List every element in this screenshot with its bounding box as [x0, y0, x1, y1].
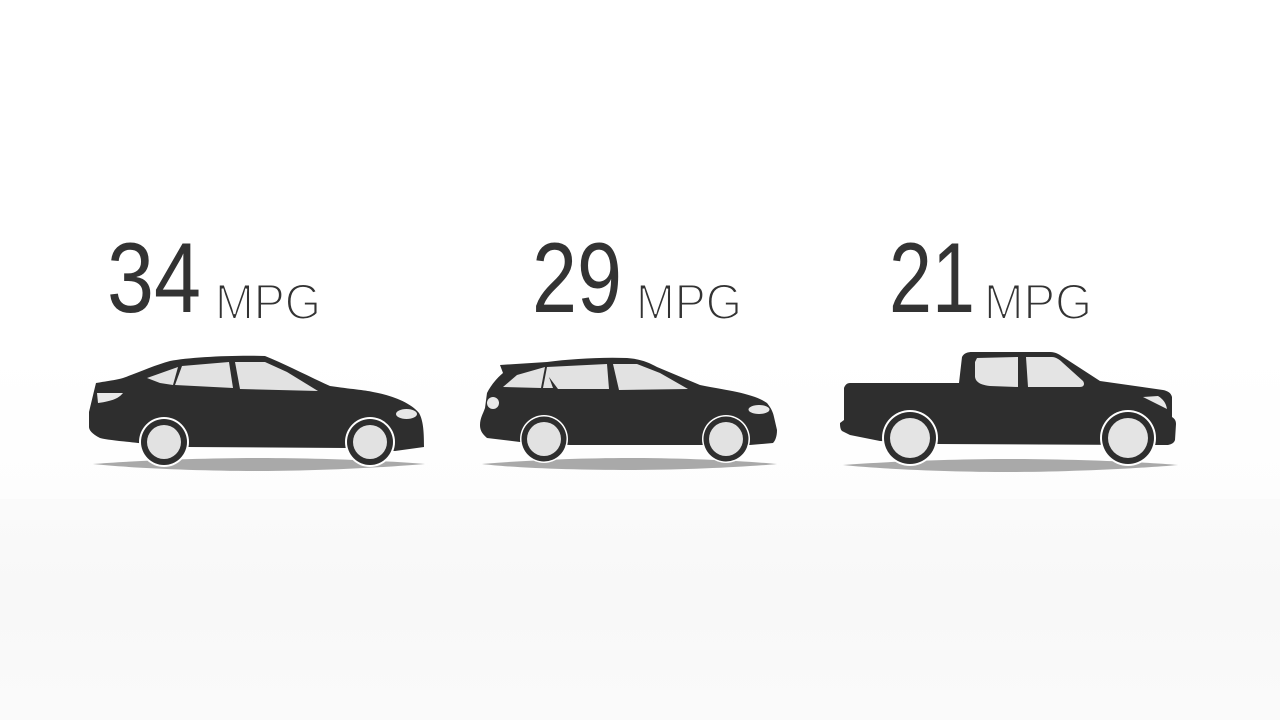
label: MPG: MPG — [636, 274, 742, 330]
icon: pickup shadow — [843, 459, 1178, 472]
label: MPG: MPG — [215, 274, 321, 330]
figure: 34: 34 — [107, 222, 201, 333]
panel: pickup 21 MPG — [840, 222, 1178, 472]
icon: wagon shadow — [482, 458, 777, 470]
figure: 21: 21 — [889, 222, 975, 333]
icon: wagon — [480, 358, 777, 463]
label: MPG: MPG — [984, 274, 1092, 330]
figure: 29: 29 — [532, 222, 622, 333]
panel: wagon 29 MPG — [480, 222, 777, 470]
icon: sedan shadow — [93, 458, 425, 471]
icon: pickup — [840, 352, 1176, 466]
panel: sedan 34 MPG — [89, 222, 425, 471]
icon: sedan — [89, 356, 424, 467]
